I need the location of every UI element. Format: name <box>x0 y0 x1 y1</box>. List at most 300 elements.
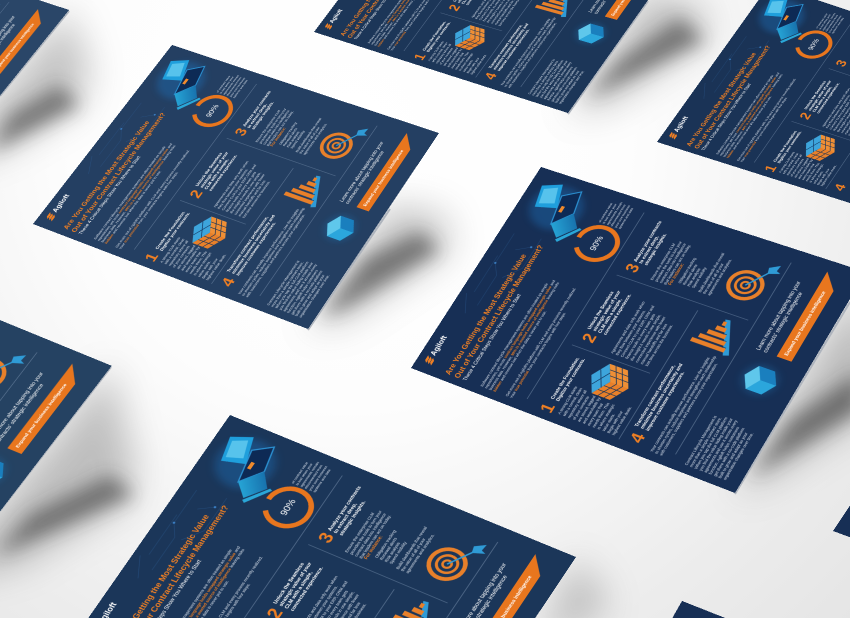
step 3 note: agreements and analytics. <box>405 533 436 574</box>
logo: Agiloft <box>328 9 344 24</box>
second paragraph: Your true potential from your contracts begins with four steps. <box>509 312 567 399</box>
second paragraph: Get more out of Agiloft's platform with CLM and every process recently realized. <box>114 149 191 248</box>
closing paragraph: get there with a no-code platform <box>290 270 323 315</box>
title: Out of Your Contract Lifecycle Management? <box>692 45 772 150</box>
90 percent value: 90% <box>806 38 821 51</box>
step 2 heading: strategic value of your <box>592 290 622 332</box>
button label: Expand your business intelligence <box>363 149 405 207</box>
step 3 heading: to extract deep, <box>333 502 358 534</box>
step 3 heading <box>633 220 674 266</box>
step 1 body: and searchable by <box>446 48 463 68</box>
step 3 number: 3 <box>833 58 850 68</box>
step 3 note: agreements and analytics. <box>302 123 328 155</box>
step 2 body: lost time across the business. <box>644 324 674 367</box>
step 4 body: with customers, suppliers and partners across your organization. <box>245 213 306 298</box>
step 1 body: every team that <box>801 163 815 181</box>
second paragraph: Get more out of Agiloft's platform with CLM and every process recently realized. <box>505 287 577 397</box>
bullet list: Risk analysis <box>686 268 702 287</box>
second paragraph: Get more out of Agiloft's platform with CLM and every process recently realized. <box>736 78 797 162</box>
step 3 body: Ensure the enterprise CLM <box>255 110 281 143</box>
step 1 body: and searchable by <box>180 246 201 271</box>
step 3 body <box>255 107 295 147</box>
bullet list: Spend visibility <box>388 541 408 565</box>
flyer artwork <box>0 0 69 165</box>
step 1 heading: Digitize your contracts. <box>777 131 803 164</box>
statistic caption: your core business <box>828 15 842 33</box>
step 3 note: the value of all of your <box>702 263 725 294</box>
statistic caption <box>598 199 636 230</box>
statistic caption: agreements remain <box>606 202 623 225</box>
step 1 body: with a central, clean <box>431 42 448 63</box>
step 2 body: the insight it needs in one simple, <box>229 172 262 214</box>
flyer: top left partial <box>0 0 69 165</box>
step 4 heading: minimize business uncertainty and <box>231 214 276 274</box>
step 3 body: contract data into intelligence <box>658 243 687 284</box>
second paragraph: Your true potential from your contracts begins with four steps. <box>739 97 788 163</box>
second paragraph: Your true potential from your contracts begins with four steps. <box>118 171 179 250</box>
step 1 body: needs them. This <box>454 52 470 70</box>
90 percent value: 90% <box>588 235 606 252</box>
intro paragraph: repositories, yet most contract language holds untapped strategic value and <box>484 280 556 389</box>
statistic caption: disconnected from <box>610 204 627 227</box>
flyer: lower right corner sliver <box>833 261 850 618</box>
subtitle: These 4 Critical Steps Show You Where to Start <box>462 293 522 382</box>
flyer artwork and icons <box>657 0 850 222</box>
step 1 body: are stored, tagged <box>442 47 459 66</box>
step 1 body: A strong CLM starts <box>427 41 445 61</box>
step 3 body: that leaders can act on today. <box>266 111 294 147</box>
closing paragraph: you find the value hiding inside your <box>278 262 314 311</box>
step 1 number: 1 <box>762 163 780 174</box>
bullet list: Spend visibility <box>691 267 708 289</box>
flyer artwork and icons <box>33 45 439 329</box>
step 1 heading: Create the Foundation. <box>155 211 186 250</box>
step 3 number: 3 <box>621 261 644 275</box>
step 2 heading: connected experience. <box>816 82 841 114</box>
flyer: bottom edge sliver <box>512 601 850 618</box>
step 2 heading: CLM with a simple, <box>204 159 230 190</box>
step 1 body: repository where all <box>786 154 803 176</box>
step 1 body: of your contracts <box>172 245 191 268</box>
step 1 body: A strong CLM starts <box>159 237 181 263</box>
step 4 heading: minimize business uncertainty and <box>639 363 684 430</box>
step 2 body: lost time across the business. <box>242 180 271 218</box>
learn more text: contracts' strategic intelligence <box>344 150 385 205</box>
step 2 body <box>296 575 376 618</box>
flyer: center full <box>411 167 850 493</box>
closing paragraph <box>266 257 334 318</box>
bullet list <box>278 122 309 149</box>
statistic caption: your core business <box>613 205 631 228</box>
step 1 body: with a central, clean <box>163 238 185 265</box>
step 3 note: Build dashboards that reveal <box>395 526 428 570</box>
bullet list: Renewal alerts <box>282 128 298 147</box>
closing paragraph: Contract Lifecycle Management is <box>266 260 300 306</box>
subtitle: These 4 Critical Steps Show You Where to Start <box>78 156 141 235</box>
step 3 body: contract data into intelligence <box>353 513 387 557</box>
step 1 body: Begin with your <box>816 168 830 185</box>
step 4 heading: Transform contract performance, <box>634 364 676 428</box>
step 1 body: repository where all <box>435 44 452 64</box>
closing paragraph: Contract Lifecycle Management is <box>684 415 718 466</box>
bullet list <box>677 257 711 289</box>
step 4 number: 4 <box>626 431 649 446</box>
statistic caption: disconnected from <box>225 77 242 96</box>
step 2 heading: CLM with a simple, <box>284 571 314 610</box>
step 3 body: provides the tools to turn your <box>258 108 287 144</box>
step 1 body: highest value deals. <box>611 406 633 436</box>
step 1 body: highest value deals. <box>470 54 487 75</box>
bullet list: Obligation tracking <box>278 122 298 145</box>
step 1 body: of your contracts <box>572 396 590 421</box>
step 3 heading: Analyze your contracts <box>242 90 272 127</box>
step 2 heading: strategic value of your <box>199 151 229 188</box>
step 1 body: needs them. This <box>591 402 610 428</box>
statistic caption: agreements remain <box>299 461 320 488</box>
flyer artwork <box>512 601 850 618</box>
step 2 heading: strategic value of your <box>808 80 832 111</box>
step 1 body: Begin with your <box>201 258 219 279</box>
step 2 heading: strategic value of your <box>278 562 313 607</box>
intro paragraph: Software contract lifecycle management systems are often treated as simple <box>715 75 774 155</box>
closing paragraph: organization changes over time. <box>722 432 754 481</box>
step 2 body: they flow between your systems. <box>615 310 647 356</box>
step 1 body: repository where all <box>168 240 189 266</box>
step 1 heading: Digitize your contracts. <box>159 212 191 252</box>
step 2 body: the insight it needs in one simple, <box>629 314 662 361</box>
bullet list: Risk analysis <box>286 131 300 148</box>
step 2 heading: connected experience. <box>289 566 325 612</box>
closing paragraph: function. Agiloft helps customers <box>286 269 319 314</box>
intro paragraph: Software contract lifecycle management systems are often treated as simple <box>93 146 166 240</box>
flyer: left middle partial <box>0 231 111 581</box>
closing paragraph: function. Agiloft helps customers <box>546 66 574 101</box>
step 4 number: 4 <box>218 276 239 289</box>
flyer artwork and icons <box>411 167 850 493</box>
closing paragraph: agreements and use it across every <box>542 62 572 100</box>
flyer: bottom center <box>75 415 576 618</box>
learn more text: Learn more about tapping into your <box>755 281 802 351</box>
step 1 body <box>159 236 227 281</box>
step 3 body: that leaders can act on today. <box>358 514 392 559</box>
step 4 heading: Transform contract performance, <box>488 24 523 69</box>
step 2 body: finance tools so every team gets <box>225 171 257 212</box>
step 1 body: is where strategic <box>809 164 824 183</box>
bullet list: Renewal alerts <box>379 537 398 561</box>
closing paragraph: agreements and use it across every <box>282 263 318 312</box>
step 1 body: with a central, clean <box>562 387 583 417</box>
step 3 heading: to extract deep, <box>638 235 660 264</box>
statistic caption <box>815 10 846 34</box>
step 2 heading: connected experience. <box>602 293 633 336</box>
step 2 heading: Unlock the Seamless <box>587 291 615 330</box>
step 3 body: that leaders can act on today. <box>663 244 692 285</box>
step 4 heading: improve customer experiences. <box>235 222 277 276</box>
step 2 heading <box>587 288 633 336</box>
step 1 heading: Create the Foundation. <box>550 357 581 400</box>
title: Are You Getting the Most Strategic Value <box>685 52 758 147</box>
step 2 number: 2 <box>578 331 601 345</box>
bullet list: Risk analysis <box>384 542 401 563</box>
statistic caption <box>216 72 250 99</box>
step 2 body <box>470 0 528 26</box>
step 1 body: with a central, clean <box>782 153 799 174</box>
statistic caption: is lost when your <box>219 76 235 94</box>
closing paragraph: built to grow and adapt as your <box>294 274 325 317</box>
step 4 body: with customers, suppliers and partners across your organization. <box>507 22 558 88</box>
step 3 note <box>395 526 438 574</box>
step 1 body: highest value deals. <box>820 165 837 187</box>
step 1 body: is where strategic <box>193 252 212 276</box>
statistic caption: agreements remain <box>821 13 836 31</box>
step 1 body: are stored, tagged <box>176 245 196 270</box>
statistic caption: of contract value <box>216 75 231 93</box>
flyer: top center <box>314 0 680 113</box>
statistic caption: systems and data <box>312 469 332 493</box>
bullet list: Spend visibility <box>290 130 306 149</box>
step 4 number: 4 <box>831 182 849 193</box>
step 2 heading: CLM with a simple, <box>812 86 833 113</box>
step 3 body: provides the tools to turn your <box>349 510 383 555</box>
logo: Agiloft <box>672 116 690 133</box>
step 1 heading: Digitize your contracts. <box>555 358 586 402</box>
step 2 body: they flow between your systems. <box>217 168 249 209</box>
flyer artwork <box>0 231 111 581</box>
intro paragraph: Software contract lifecycle management systems are often treated as simple <box>479 283 549 387</box>
step 1 number: 1 <box>411 52 429 62</box>
step 1 body: of your contracts <box>439 48 454 65</box>
step 3 body: Ensure the enterprise CLM <box>344 512 375 553</box>
step 2 body: Agreements and data only work when <box>213 160 249 208</box>
bullet list: Obligation tracking <box>374 529 397 559</box>
step 4 heading: minimize business uncertainty and <box>492 23 530 70</box>
step 1 body: value starts. <box>462 59 474 72</box>
step 2 number: 2 <box>186 188 206 200</box>
step 3 heading: strategic insights. <box>251 101 275 130</box>
intro paragraph: hidden and revenue lost when the data is never put to use. <box>726 96 772 158</box>
closing paragraph: When you tap the full CLM platform <box>274 261 310 309</box>
closing paragraph <box>527 57 588 105</box>
step 3 heading <box>327 485 374 537</box>
step 1 body: value starts. <box>601 413 616 432</box>
button label: Expand your business intelligence <box>784 291 827 356</box>
title: Out of Your Contract Lifecycle Management? <box>70 112 167 233</box>
learn more text: contracts' strategic intelligence <box>762 292 804 353</box>
closing paragraph: function. Agiloft helps customers <box>708 426 740 475</box>
statistic caption: disconnected from <box>825 15 839 32</box>
step 1 body <box>427 41 488 75</box>
statistic caption: your core business <box>308 465 328 491</box>
step 1 body: needs them. This <box>805 163 820 182</box>
step 1 body: every team that <box>184 251 202 273</box>
step 3 number: 3 <box>231 126 251 138</box>
step 3 body <box>649 239 692 285</box>
statistic caption: disconnected from <box>303 464 324 490</box>
step 3 note: agreements and analytics. <box>706 259 733 296</box>
intro paragraph: hidden and revenue lost when the data is never put to use. <box>104 170 162 244</box>
step 2 body <box>609 301 681 367</box>
step 1 body: every team that <box>586 403 604 426</box>
step 3 heading: strategic insights. <box>338 500 367 537</box>
bullet list: Obligation tracking <box>677 257 697 284</box>
for instance label: For instance: <box>270 127 287 147</box>
closing paragraph: built to grow and adapt as your <box>554 70 580 103</box>
statistic caption: of contract value <box>815 13 828 29</box>
step 3 note: Build dashboards that reveal <box>295 118 322 153</box>
bullet list <box>374 529 412 565</box>
step 3 heading: to extract deep, <box>246 103 268 129</box>
step 4 heading: improve customer experiences. <box>645 371 686 432</box>
logo: Agiloft <box>51 193 71 213</box>
intro paragraph: repositories, yet most contract language holds untapped strategic value and <box>97 143 173 241</box>
step 2 body: Agreements and data only work when <box>610 301 646 354</box>
step 1 body: are stored, tagged <box>576 395 597 422</box>
step 1 body: repository where all <box>567 390 588 419</box>
flyer artwork and icons <box>314 0 680 113</box>
subtitle: These 4 Critical Steps Show You Where to Start <box>700 83 752 151</box>
step 2 heading <box>804 78 841 114</box>
statistic caption: agreements remain <box>222 75 240 95</box>
step 1 body: is where strategic <box>596 404 616 430</box>
step 3 note: the value of all of your <box>298 127 321 154</box>
step 2 body: connected experience with fewer <box>634 316 667 363</box>
step 1 body: and searchable by <box>797 159 814 179</box>
step 1 body: highest value deals. <box>205 254 227 281</box>
statistic caption: of contract value <box>598 202 613 223</box>
step 4 body: with customers, suppliers and partners across your organization. <box>659 362 719 456</box>
statistic caption <box>290 458 334 493</box>
learn more text: Learn more about tapping into your <box>339 141 385 203</box>
step 2 body: finance tools so every team gets <box>625 313 656 360</box>
step 1 body: needs them. This <box>188 251 208 274</box>
step 1 body: is where strategic <box>458 53 474 71</box>
step 4 body: Your contracts can actually improve performance. Use the insights <box>649 357 711 453</box>
step 2 body: Agreements and data only work when <box>821 88 850 127</box>
intro paragraph: hidden and revenue lost when the data is never put to use. <box>492 310 547 392</box>
step 1 body: Begin with your <box>606 410 624 434</box>
closing paragraph: get there with a no-code platform <box>713 427 746 477</box>
closing paragraph: organization changes over time. <box>558 70 585 104</box>
step 3 number: 3 <box>314 530 339 546</box>
statistic caption: of contract value <box>290 461 309 484</box>
step 4 heading: improve customer experiences. <box>497 29 531 72</box>
step 1 body: A strong CLM starts <box>778 151 795 173</box>
step 3 note: Build dashboards that reveal <box>697 252 725 293</box>
statistic caption: is lost when your <box>818 14 832 30</box>
closing paragraph: more than a simple contract store. <box>689 417 723 468</box>
step 1 body: are stored, tagged <box>793 158 810 178</box>
closing paragraph: When you tap the full CLM platform <box>693 417 729 470</box>
step 2 body <box>212 160 279 219</box>
statistic caption: systems and data <box>617 208 634 229</box>
step 1 body: value starts. <box>812 170 824 184</box>
closing paragraph: get there with a no-code platform <box>550 67 578 102</box>
step 3 heading: Analyze your contracts <box>327 485 362 532</box>
step 2 heading: Unlock the Seamless <box>804 80 827 110</box>
closing paragraph: you find the value hiding inside your <box>698 418 734 471</box>
step 3 note <box>697 252 735 296</box>
step 4 number: 4 <box>481 71 500 81</box>
for instance label: For instance: <box>363 535 384 560</box>
statistic caption: your core business <box>229 77 246 97</box>
step 1 heading: Digitize your contracts. <box>426 22 452 53</box>
step 2 number: 2 <box>446 3 464 12</box>
button label: Expand your business intelligence <box>15 383 68 449</box>
step 2 number: 2 <box>797 111 814 121</box>
step 3 body: provides the tools to turn your <box>654 241 683 282</box>
step 1 body <box>778 151 838 187</box>
90 percent value: 90% <box>278 498 298 517</box>
closing paragraph: When you tap the full CLM platform <box>535 60 564 97</box>
step 1 number: 1 <box>536 401 559 415</box>
step 2 heading <box>272 559 325 612</box>
step 4 heading: Transform contract performance, <box>226 216 269 273</box>
step 1 body: Begin with your <box>466 57 480 74</box>
90 percent value: 90% <box>204 103 221 118</box>
step 3 heading: Analyze your contracts <box>633 220 663 263</box>
flyer: top right <box>657 0 850 222</box>
closing paragraph: more than a simple contract store. <box>270 261 304 307</box>
step 1 body <box>557 385 633 436</box>
closing paragraph: agreements and use it across every <box>703 420 738 473</box>
step 1 heading: Create the Foundation. <box>422 21 447 51</box>
step 1 body: and searchable by <box>581 397 602 424</box>
step 4 body: to shorten cycles, reduce surprises and strengthen each relationship <box>503 17 556 87</box>
statistic caption: is lost when your <box>295 463 314 486</box>
step 4 body: to shorten cycles, reduce surprises and strengthen each relationship <box>654 355 717 454</box>
closing paragraph: you find the value hiding inside your <box>539 60 569 98</box>
statistic caption: systems and data <box>232 80 248 99</box>
statistic caption: systems and data <box>831 17 845 34</box>
step 1 number: 1 <box>142 251 162 264</box>
step 2 body: connected experience with fewer <box>233 174 266 215</box>
step 1 body: of your contracts <box>789 158 805 177</box>
intro paragraph: business data. However, 99% is a wasted source of intelligence leaving risks <box>488 282 560 391</box>
for instance label: For instance: <box>668 263 685 286</box>
step 3 body: contract data into intelligence <box>262 110 290 145</box>
intro paragraph: business data. However, 99% is a wasted source of intelligence leaving risks <box>722 74 783 157</box>
step 1 body: value starts. <box>197 260 212 277</box>
title: Out of Your Contract Lifecycle Management? <box>452 244 545 379</box>
step 2 heading <box>453 0 490 6</box>
closing paragraph: more than a simple contract store. <box>531 60 560 96</box>
step 3 heading: strategic insights. <box>643 233 668 266</box>
step 3 note: the value of all of your <box>400 538 426 572</box>
logo: Agiloft <box>429 335 449 357</box>
bullet list: Renewal alerts <box>682 264 698 285</box>
intro paragraph: repositories, yet most contract language holds untapped strategic value and <box>719 72 780 156</box>
closing paragraph: Contract Lifecycle Management is <box>527 59 556 95</box>
step 2 body: Connect CLM to your ERP, CRM and <box>620 305 655 358</box>
flyer: upper left full <box>33 45 439 329</box>
step 1 heading: Create the Foundation. <box>773 130 798 162</box>
statistic caption: is lost when your <box>602 203 618 224</box>
step 2 heading: Unlock the Seamless <box>195 152 223 187</box>
step 1 body: every team that <box>450 52 465 69</box>
flyer artwork and icons <box>75 415 576 618</box>
step 4 body: Your contracts can actually improve performance. Use the insights <box>500 18 551 86</box>
step 3 body <box>344 508 393 559</box>
closing paragraph <box>684 412 758 481</box>
step 2 heading <box>195 150 239 192</box>
closing paragraph: organization changes over time. <box>298 274 330 318</box>
intro paragraph: business data. However, 99% is a wasted source of intelligence leaving risks <box>100 145 176 243</box>
step 2 body: manual handoffs and far less <box>639 323 668 365</box>
step 4 body: to shorten cycles, reduce surprises and strengthen each relationship <box>241 207 306 296</box>
title: Are You Getting the Most Strategic Value <box>443 253 528 376</box>
closing paragraph: built to grow and adapt as your <box>717 432 749 479</box>
step 3 body: Ensure the enterprise CLM <box>649 243 676 281</box>
